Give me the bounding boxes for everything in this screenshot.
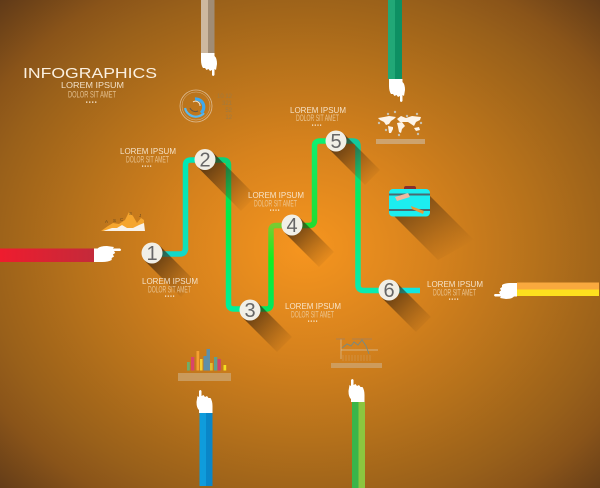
- label: step 6: [427, 279, 483, 300]
- arm: green from bottom: [348, 379, 365, 488]
- icon: suitcase: [389, 186, 474, 260]
- label: step 2: LOREM IPSUM: [120, 146, 176, 156]
- step 3 marker: [240, 300, 292, 352]
- step 5 marker: [326, 130, 380, 185]
- label: step 5: LOREM IPSUM: [290, 105, 346, 115]
- label: step 6: DOLOR SIT AMET: [433, 288, 476, 298]
- subtitle second line: DOLOR SIT AMET: [68, 90, 116, 100]
- icon: area chart: J: [139, 213, 141, 218]
- label: step 5: DOLOR SIT AMET: [296, 113, 339, 124]
- label: step 3: [285, 301, 341, 322]
- icon: area chart: [101, 211, 145, 231]
- label: step 2: DOLOR SIT AMET: [126, 154, 169, 166]
- label: step 1: LOREM IPSUM: [142, 276, 198, 286]
- label: step 4: DOLOR SIT AMET: [254, 198, 297, 210]
- step 4 marker: [282, 214, 334, 267]
- title block: [23, 65, 157, 103]
- step 2 marker: 2: [199, 150, 211, 172]
- label: step 6: LOREM IPSUM: [427, 279, 483, 289]
- icon: area chart: S: [129, 211, 132, 216]
- icon: area chart: A: [105, 219, 108, 224]
- step 4 marker: 4: [286, 215, 298, 237]
- icon: area chart: C: [120, 217, 124, 222]
- label: step 4: LOREM IPSUM: [248, 190, 304, 200]
- icon: line chart: [331, 339, 382, 368]
- icon: bar chart: [178, 349, 231, 381]
- arm: red from left: [0, 246, 121, 262]
- icon: world map: [376, 111, 425, 144]
- step 6 marker: [378, 280, 431, 332]
- arm: green from top: [388, 0, 405, 102]
- step 3 marker: 3: [244, 300, 256, 322]
- label: step 1: DOLOR SIT AMET: [148, 284, 191, 296]
- gauge numbers: [217, 94, 233, 121]
- step 1 marker: 1: [146, 243, 158, 265]
- label: step 2: [120, 146, 176, 167]
- gauge numbers: 10 12: [217, 94, 233, 100]
- icon: circular gauge: [180, 90, 233, 122]
- gauge numbers: 52: [225, 108, 233, 114]
- step 6 marker: 6: [383, 280, 395, 302]
- icon: area chart: S: [113, 218, 116, 223]
- gauge numbers: 12: [225, 115, 233, 121]
- dots: [86, 102, 96, 103]
- label: step 4: [248, 190, 304, 211]
- connector line: [160, 141, 420, 309]
- arm: yellow from right: [494, 282, 599, 299]
- label: step 3: LOREM IPSUM: [285, 301, 341, 311]
- label: step 1: [142, 276, 198, 297]
- step 2 marker: [194, 149, 256, 211]
- title: INFOGRAPHICS: [23, 65, 157, 82]
- arm: grey from top: [201, 0, 217, 76]
- label: step 3: DOLOR SIT AMET: [291, 310, 334, 320]
- step 1 marker: [142, 242, 196, 297]
- label: step 5: [290, 105, 346, 126]
- gauge numbers: 321: [222, 101, 233, 107]
- subtitle: LOREM IPSUM: [61, 80, 124, 90]
- arm: blue from bottom: [196, 390, 212, 486]
- step 5 marker: 5: [330, 131, 342, 153]
